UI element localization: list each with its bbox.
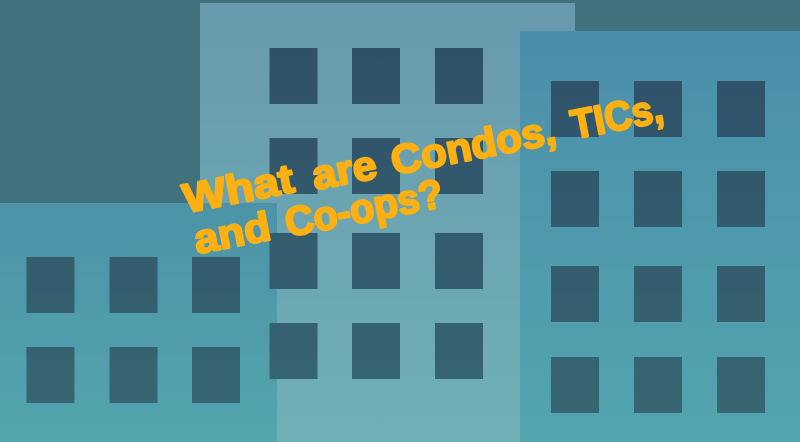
middle building windows <box>270 48 483 379</box>
title: What <box>179 155 298 222</box>
middle building <box>200 3 575 442</box>
title: and <box>190 203 274 263</box>
right building <box>520 31 800 442</box>
title: are <box>308 141 381 199</box>
title: TICs, <box>567 85 667 148</box>
title: Condos, <box>387 107 560 184</box>
right building windows <box>551 81 765 413</box>
left building <box>0 203 277 442</box>
left building windows <box>26 257 240 403</box>
title: Co-ops? <box>281 170 447 246</box>
title <box>179 85 667 263</box>
